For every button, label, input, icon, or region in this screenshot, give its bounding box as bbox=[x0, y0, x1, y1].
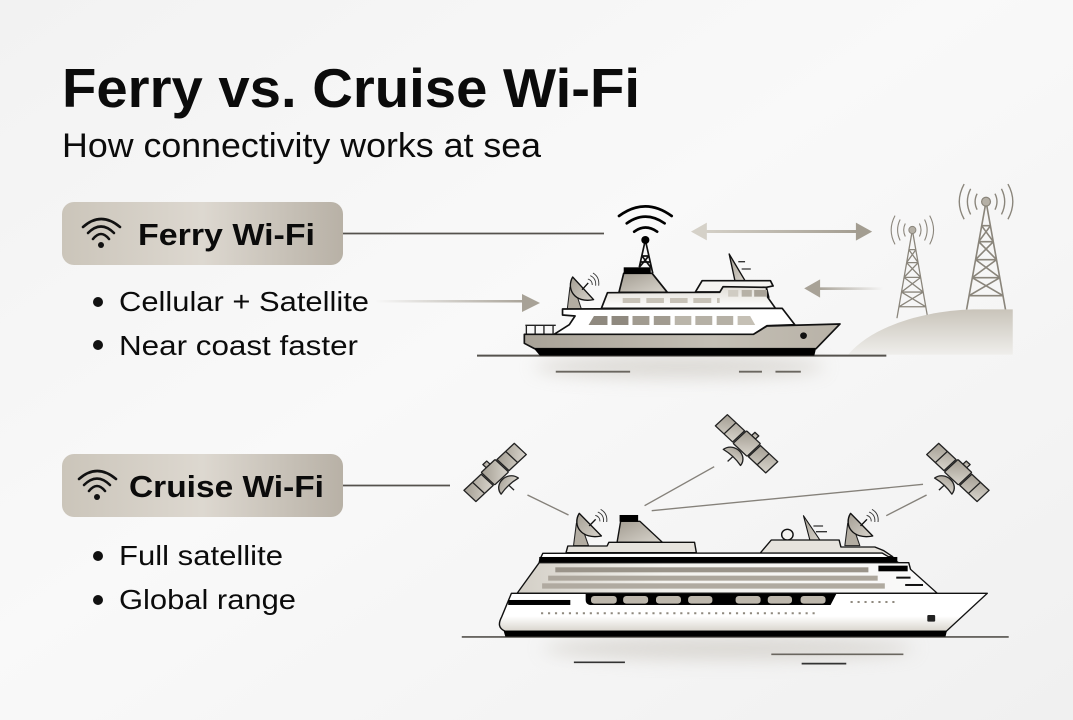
cruise superstructure bbox=[517, 563, 937, 593]
subtitle: How connectivity works at sea bbox=[62, 127, 541, 165]
cruise ship bbox=[499, 509, 987, 637]
cruise connector line bbox=[343, 484, 450, 486]
cruise top deck bbox=[539, 553, 898, 562]
water ripples bbox=[574, 662, 846, 664]
icon: large cell tower bbox=[959, 184, 1013, 310]
cruise shadow bbox=[543, 637, 914, 660]
cruise aft platform bbox=[566, 542, 696, 553]
cruise bullet list bbox=[93, 540, 296, 615]
icon: right satellite bbox=[914, 439, 993, 514]
ferry bridge deck bbox=[695, 281, 773, 297]
cruise hull bbox=[499, 593, 987, 637]
water line bbox=[462, 634, 1009, 639]
ferry shadow bbox=[534, 355, 824, 378]
cruise bullet list: Global range bbox=[119, 584, 296, 615]
icon: cruise label wifi bbox=[79, 471, 116, 500]
ferry funnel bbox=[619, 273, 667, 292]
ferry bullet list bbox=[93, 286, 369, 361]
ferry bullet list: Near coast faster bbox=[119, 330, 358, 361]
panel: ferry label bbox=[62, 202, 343, 265]
icon: cruise aft satellite dish bbox=[574, 509, 607, 546]
icon: cruise forward satellite dish bbox=[845, 509, 878, 546]
ferry upper deck bbox=[601, 287, 775, 308]
cruise window band bbox=[586, 594, 836, 605]
arrow: tower to ferry bbox=[804, 279, 884, 298]
cruise scene bbox=[460, 411, 1009, 664]
cruise bullet list: Full satellite bbox=[119, 540, 283, 571]
ferry mast and wifi bbox=[619, 206, 672, 273]
ferry scene bbox=[477, 184, 1013, 378]
cruise portholes bbox=[541, 610, 818, 616]
coastal hill bbox=[848, 309, 1013, 355]
arrow: satellite link to ferry bbox=[375, 294, 540, 312]
water line bbox=[477, 353, 886, 359]
ferry ship bbox=[524, 206, 840, 356]
icon: ferry label wifi bbox=[83, 219, 120, 248]
cruise funnel bbox=[617, 515, 662, 542]
ferry connector line bbox=[343, 232, 604, 234]
cruise forward platform bbox=[761, 540, 893, 557]
arrow: two-way cellular link bbox=[691, 223, 872, 241]
panel: cruise label bbox=[62, 454, 343, 517]
icon: left satellite bbox=[460, 439, 539, 514]
cruise label text: Cruise Wi-Fi bbox=[129, 469, 324, 504]
ferry label text: Ferry Wi-Fi bbox=[138, 217, 315, 252]
ferry hull bbox=[524, 324, 840, 356]
icon: small cell tower bbox=[891, 216, 934, 318]
ferry main deck bbox=[554, 308, 795, 334]
icon: middle satellite bbox=[702, 411, 782, 485]
icon: ferry satellite dish bbox=[567, 273, 599, 309]
ferry radar mast bbox=[729, 254, 751, 281]
satellite signal lines bbox=[527, 467, 927, 516]
cruise radar mast bbox=[803, 516, 827, 540]
cruise radar dome bbox=[782, 529, 793, 540]
title: Ferry vs. Cruise Wi-Fi bbox=[62, 57, 640, 119]
water ripples bbox=[556, 369, 801, 374]
ferry railing bbox=[525, 325, 556, 334]
ferry bullet list: Cellular + Satellite bbox=[119, 286, 369, 317]
